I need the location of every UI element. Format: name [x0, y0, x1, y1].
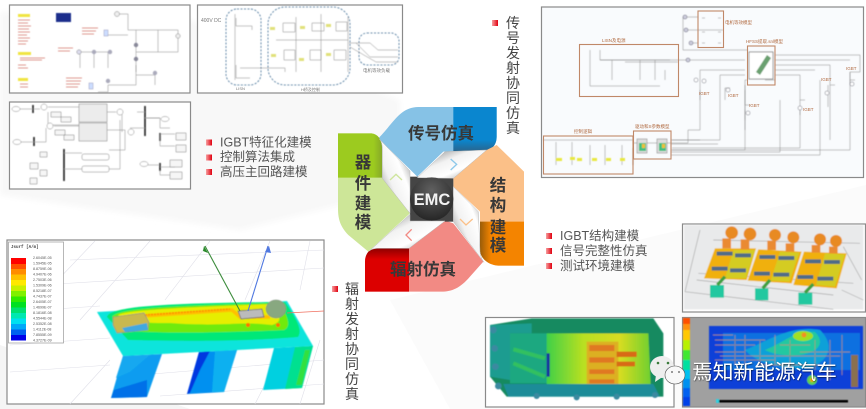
legend: Jsurf colour scale: 1.5945E-05 — [33, 262, 52, 266]
panel: conducted co-simulation schematic — [542, 7, 864, 178]
vertical label: radiated emission co-simulation: 发 — [345, 311, 359, 327]
legend: Jsurf colour scale: 1.5309E-06 — [33, 284, 52, 288]
panel: inverter topology — [198, 5, 402, 93]
petal labels: 模 — [490, 236, 507, 255]
panel: conducted co-simulation schematic: LISN及电源 — [602, 37, 626, 44]
vertical label: radiated emission co-simulation: 射 — [345, 296, 359, 312]
panel: conducted co-simulation schematic: 驱动和S参数模型 — [635, 123, 670, 130]
legend: Jsurf colour scale: 4.3727E-09 — [33, 338, 52, 342]
legend: Jsurf colour scale: 7.8555E-09 — [33, 333, 52, 337]
legend: Jsurf colour scale: 2.6045E-05 — [33, 256, 52, 260]
panel: conducted co-simulation schematic: IGBT — [846, 66, 857, 71]
legend: Jsurf colour scale: 1.4699E-07 — [33, 306, 52, 310]
panel: conducted co-simulation schematic: IGBT — [803, 107, 814, 112]
legend: Jsurf colour scale: 4.7437E-07 — [33, 294, 52, 298]
legend: Jsurf colour scale: Jsurf [A/m] — [11, 245, 39, 250]
petal labels: 器 — [355, 154, 372, 172]
legend: Jsurf colour scale: 8.5218E-07 — [33, 289, 52, 293]
list: device modelling: IGBT特征化建模 — [220, 134, 312, 150]
vertical label: conducted emission co-simulation: 协 — [506, 75, 520, 91]
legend: Jsurf colour scale — [8, 242, 64, 343]
vertical label: radiated emission co-simulation: 射 — [345, 326, 359, 342]
vertical label: radiated emission co-simulation: 协 — [345, 341, 359, 357]
panel: device schematic — [10, 5, 190, 93]
list: device modelling: 高压主回路建模 — [220, 164, 308, 179]
list: structure modelling: 测试环境建模 — [560, 258, 636, 273]
panel: conducted co-simulation schematic: 电机等效模型 — [725, 19, 752, 26]
vertical label: radiated emission co-simulation: 同 — [345, 356, 359, 372]
vertical label: conducted emission co-simulation: 真 — [506, 120, 520, 136]
panel: PCB near-field scan — [682, 318, 866, 407]
vertical label: conducted emission co-simulation: 仿 — [506, 105, 520, 121]
panel: conducted co-simulation schematic: IGBT — [821, 77, 832, 82]
list: device modelling — [206, 134, 312, 179]
petal labels: 传号仿真 — [408, 123, 474, 143]
legend: Jsurf colour scale: 8.1816E-08 — [33, 311, 52, 315]
vertical label: conducted emission co-simulation: 同 — [506, 90, 520, 106]
list: structure modelling: IGBT结构建模 — [560, 228, 640, 243]
vertical label: radiated emission co-simulation: 仿 — [345, 371, 359, 387]
list: structure modelling — [546, 228, 648, 273]
legend: Jsurf colour scale: 8.8759E-06 — [33, 267, 52, 271]
panel: control block diagram — [10, 102, 190, 189]
icon: WeChat logo — [650, 356, 685, 384]
vertical label: radiated emission co-simulation: 辐 — [345, 281, 359, 297]
petal labels: 件 — [355, 174, 371, 193]
centre label: EMC — [414, 191, 450, 209]
panel: inverter topology: 电机等效负载 — [363, 67, 390, 74]
panel: conducted co-simulation schematic: IGBT — [749, 103, 760, 108]
vertical label: conducted emission co-simulation: 传 — [506, 15, 520, 31]
vertical label: radiated emission co-simulation — [332, 281, 359, 402]
fold ribbons — [369, 139, 487, 262]
panel: conducted co-simulation schematic: IGBT — [699, 91, 710, 96]
vertical label: conducted emission co-simulation: 号 — [506, 30, 520, 46]
panel: conducted co-simulation schematic: 控制逻辑 — [574, 128, 592, 135]
panel: inverter topology: LISN — [236, 86, 245, 91]
watermark: 焉知新能源汽车 — [692, 355, 837, 385]
centre circle — [410, 177, 453, 221]
fold chevrons — [390, 159, 473, 241]
legend: Jsurf colour scale: 4.9407E-06 — [33, 272, 52, 276]
vertical label: radiated emission co-simulation: 真 — [345, 386, 359, 402]
petal shapes — [338, 107, 524, 292]
legend: Jsurf colour scale: 4.5544E-08 — [33, 316, 52, 320]
petal labels: 建 — [490, 218, 506, 237]
vertical label: conducted emission co-simulation — [492, 15, 520, 136]
panel: conducted co-simulation schematic: IGBT — [728, 93, 739, 98]
petal labels: 构 — [490, 196, 506, 215]
panel: IGBT module 3D structure — [682, 224, 866, 312]
petal labels — [355, 123, 507, 279]
diagram: EMC pinwheel — [338, 107, 524, 292]
panel: conducted co-simulation schematic: HFSS提取.snl模型 — [746, 38, 784, 45]
vertical label: conducted emission co-simulation: 射 — [506, 60, 520, 76]
list: structure modelling: 信号完整性仿真 — [560, 243, 648, 258]
panel: radiated emission heat map — [7, 240, 324, 404]
panel: inverter topology: 400V DC — [201, 18, 222, 24]
legend: Jsurf colour scale: 2.6405E-07 — [33, 300, 52, 304]
legend: Jsurf colour scale: 2.5352E-08 — [33, 322, 52, 326]
petal labels: 建 — [355, 194, 371, 213]
legend: Jsurf colour scale: 1.4112E-08 — [33, 328, 51, 332]
list: device modelling: 控制算法集成 — [220, 149, 295, 164]
petal labels: 模 — [355, 213, 372, 232]
petal labels: 辐射仿真 — [390, 259, 456, 279]
panel: controller housing thermal map — [486, 318, 674, 407]
panel: inverter topology: H桥及控制 — [301, 86, 320, 92]
petal labels: 结 — [490, 176, 506, 195]
3D axes arrows — [203, 246, 324, 313]
legend: Jsurf colour scale: 2.7503E-06 — [33, 278, 52, 282]
vertical label: conducted emission co-simulation: 发 — [506, 45, 520, 61]
